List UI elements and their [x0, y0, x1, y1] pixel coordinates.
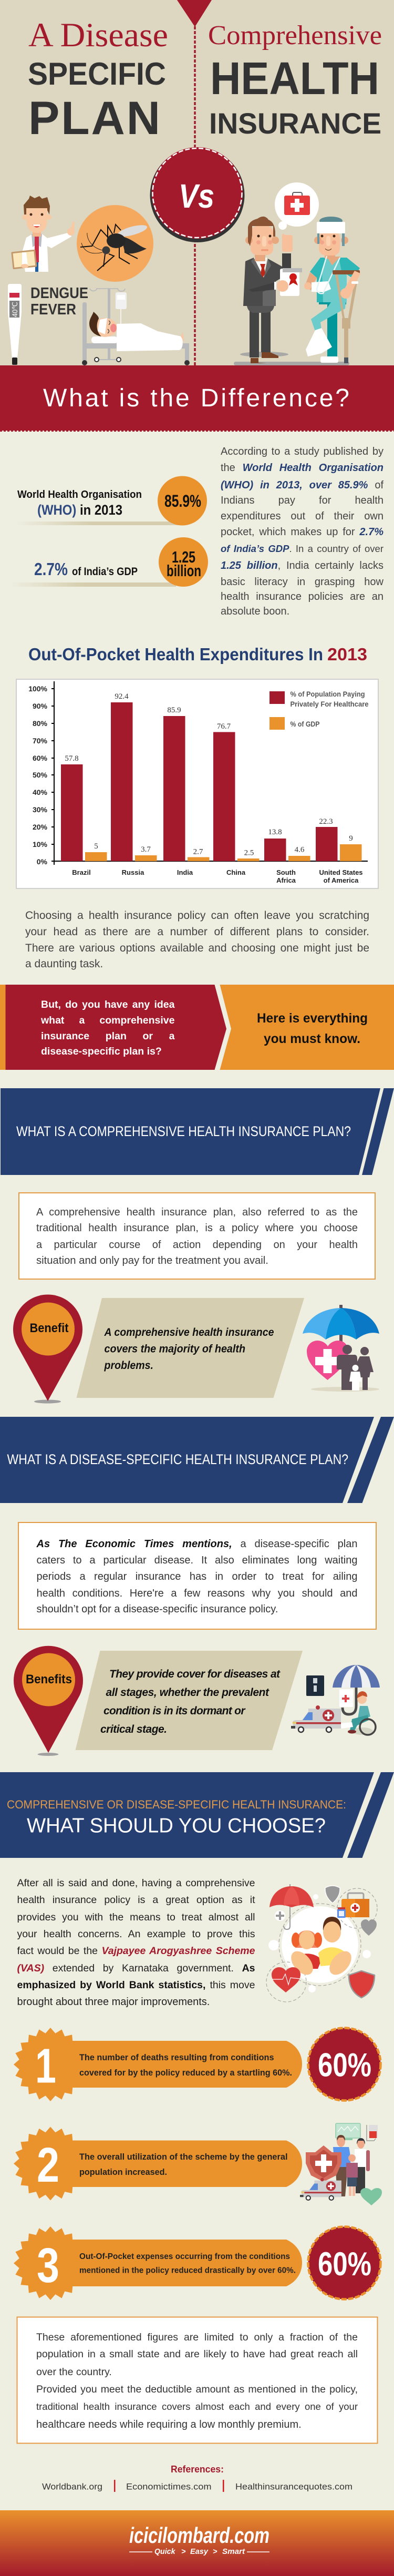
icon: dengue patient on hospital bed: [82, 289, 190, 365]
y axis with percentage labels: 70%: [33, 737, 48, 745]
vs badge: [150, 147, 245, 242]
text block: what should you choose paragraph: After all is said and done, having a comprehensive: [17, 1877, 255, 1888]
y axis with percentage labels: 30%: [33, 805, 48, 814]
answer text: [257, 1011, 368, 1046]
title: comprehensive health insurance: [208, 21, 382, 140]
improvement 2: increased utilization: population increased.: [79, 2167, 167, 2177]
question arrow: [5, 985, 226, 1070]
text block: what should you choose paragraph: emphasized by World Bank statistics, this move: [17, 1979, 255, 1990]
stat: world health organisation 85.9 percent: World Health Organisation: [17, 489, 142, 500]
bar value labels: 2.5: [244, 849, 254, 857]
panel: question and answer banner: [0, 985, 394, 1070]
text block: comprehensive plan definition: [36, 1207, 358, 1266]
bar value labels: 76.7: [217, 722, 231, 731]
footer: icicilombard brand: Smart: [222, 2548, 245, 2556]
y axis with percentage labels: 100%: [28, 684, 48, 693]
dashed centre divider: [194, 26, 196, 365]
text block: who study paragraph: Indians pay for health: [221, 495, 383, 506]
footer: icicilombard brand: >: [181, 2548, 186, 2556]
text block: who study paragraph: of India’s GDP. In a country of over: [221, 543, 383, 554]
benefits callout: all stages, whether the prevalent: [106, 1686, 269, 1699]
references: Economictimes.com: [126, 2481, 211, 2492]
banner: what is the difference: [0, 365, 394, 431]
footer: icicilombard brand: Easy: [190, 2548, 209, 2556]
chart legend: % of GDP: [290, 720, 319, 728]
question text: disease-specific plan is?: [41, 1046, 162, 1057]
footer: icicilombard brand: icicilombard.com: [129, 2523, 269, 2548]
answer text: you must know.: [264, 1031, 360, 1046]
badge: 60 percent for improvement 1: 60%: [318, 2047, 371, 2084]
icon: family under umbrella: [303, 1305, 379, 1392]
stat: 2.7 percent of india's gdp, 1.25 billion: 2.7%: [34, 559, 68, 579]
text block: choosing a policy paragraph: [25, 909, 369, 970]
question text: [41, 999, 175, 1057]
text block: disease-specific plan definition: health conditions. Here're a few reasons why you should and: [37, 1588, 357, 1599]
text block: comprehensive plan definition: traditional health insurance plan, is a policy where you choose: [36, 1222, 358, 1234]
text block: disease-specific plan definition: shouldn’t opt for a disease-specific insurance policy.: [37, 1603, 278, 1615]
y axis with percentage labels: 40%: [33, 788, 48, 796]
text block: closing notes: traditional health insurance covers almost each and every one of your: [36, 2401, 358, 2412]
banner: what is a comprehensive plan: [1, 1088, 394, 1175]
text block: what should you choose paragraph: your health concerns. An example to prove this: [17, 1928, 255, 1940]
text block: choosing a policy paragraph: a daunting task.: [25, 958, 103, 970]
panel: comparison header: [0, 0, 394, 365]
y axis with percentage labels: [28, 681, 368, 866]
bar value labels: 57.8: [65, 754, 79, 763]
benefit callout: covers the majority of health: [104, 1343, 245, 1355]
text block: choosing a policy paragraph: your head as there are a number of different plans to consider.: [25, 926, 369, 938]
improvement 1: fewer deaths: [14, 2028, 302, 2101]
improvement 3: lower out-of-pocket expenses: mentioned in the policy reduced drastically by over 60%.: [79, 2266, 296, 2275]
title: comprehensive health insurance: HEALTH: [210, 53, 379, 104]
question text: But, do you have any idea: [41, 999, 174, 1010]
icon: thermometer reading 40 degrees: 40℃: [11, 302, 19, 317]
text block: comprehensive plan definition: a particular course of action depending on your health: [36, 1239, 358, 1250]
references: References:: [171, 2464, 224, 2475]
benefit callout: [77, 1298, 304, 1398]
text block: disease-specific plan definition: caters to a particular disease. It also eliminates long waiting: [37, 1555, 357, 1566]
improvement 2: increased utilization: 2: [37, 2138, 59, 2192]
panel: disease-specific plan definition box: [18, 1522, 376, 1629]
title: a disease specific plan: PLAN: [28, 91, 160, 144]
text block: choosing a policy paragraph: There are various options available and choosing one might just be: [25, 942, 369, 954]
banner: what is the difference: What is the Difference?: [43, 384, 349, 412]
title: comprehensive health insurance: INSURANCE: [209, 107, 381, 140]
text block: closing notes: population in a small state and are likely to have had great reach all: [36, 2348, 358, 2360]
improvement 2: increased utilization: [14, 2127, 302, 2201]
banner: what should you choose: WHAT SHOULD YOU CHOOSE?: [27, 1815, 326, 1837]
text block: disease-specific plan definition: As The Economic Times mentions, a disease-specific plan: [37, 1538, 357, 1550]
country labels: of America: [324, 876, 359, 884]
icon: insurance agent showing a policy: [234, 217, 349, 365]
text block: choosing a policy paragraph: Choosing a health insurance policy can often leave you scratching: [25, 909, 369, 922]
y axis with percentage labels: 10%: [33, 840, 48, 849]
bar value labels: 85.9: [167, 706, 181, 714]
bar value labels: 4.6: [295, 845, 305, 854]
text block: closing notes: [36, 2332, 358, 2430]
bar value labels: 13.8: [268, 828, 282, 836]
badge: 60 percent for improvement 3: [308, 2227, 380, 2299]
stat: world health organisation 85.9 percent: 85.9%: [164, 492, 201, 510]
text block: closing notes: Provided you meet the deductible amount as mentioned in the policy,: [36, 2384, 358, 2395]
text block: disease-specific plan definition: periods a regular insurance has in order to treat for ailing: [37, 1571, 357, 1582]
benefits callout: They provide cover for diseases at: [109, 1668, 281, 1680]
icon: family with shield, monitor, ambulance and heart: [300, 2123, 382, 2205]
improvement 3: lower out-of-pocket expenses: 3: [37, 2238, 59, 2293]
label: dengue fever: [30, 285, 88, 318]
red bars: percent of population paying privately: [61, 702, 337, 861]
text block: what should you choose paragraph: health insurance policy is a great option as it: [17, 1894, 255, 1906]
icon: injured patient on crutches: [304, 217, 360, 363]
text block: who study paragraph: pocket, which makes up for 2.7%: [221, 526, 383, 538]
banner: what should you choose: COMPREHENSIVE OR DISEASE-SPECIFIC HEALTH INSURANCE:: [7, 1798, 346, 1811]
country labels: Russia: [122, 868, 144, 876]
y axis with percentage labels: 90%: [33, 702, 48, 710]
stat: 2.7 percent of india's gdp, 1.25 billion: billion: [167, 561, 201, 580]
icon: thermometer reading 40 degrees: [8, 284, 22, 365]
y axis with percentage labels: 20%: [33, 823, 48, 831]
bar value labels: 9: [349, 834, 353, 843]
answer text: Here is everything: [257, 1011, 368, 1026]
benefits callout: critical stage.: [100, 1723, 167, 1735]
badge: 60 percent for improvement 1: [308, 2028, 380, 2101]
heading: out-of-pocket health expenditures in 2013: 2013: [327, 645, 367, 664]
text block: closing notes: over the country.: [36, 2366, 112, 2378]
answer panel: [220, 985, 394, 1070]
text block: what should you choose paragraph: brought about three major improvements.: [17, 1996, 210, 2007]
stat: 2.7 percent of india's gdp, 1.25 billion: [10, 537, 208, 587]
question text: what a comprehensive: [41, 1015, 174, 1026]
country labels: South: [276, 868, 296, 876]
bar value labels: 2.7: [193, 847, 203, 856]
icon: speech bubble with first aid kit: [275, 182, 319, 230]
country labels: [72, 868, 363, 884]
footer: icicilombard brand: >: [213, 2548, 217, 2556]
text block: who study paragraph: health insurance policies are an: [221, 591, 383, 602]
y axis with percentage labels: 60%: [33, 754, 48, 762]
chart legend: % of Population Paying: [290, 690, 365, 698]
icon: x-ray, umbrella, ambulance and wheelchair patient: [291, 1665, 380, 1735]
references: [42, 2464, 352, 2492]
bar value labels: [65, 692, 353, 857]
text block: closing notes: These aforementioned figures are limited to only a fraction of the: [36, 2332, 358, 2343]
y axis with percentage labels: 80%: [33, 719, 48, 728]
banner: what should you choose: [0, 1772, 394, 1858]
panel: comprehensive plan definition box: [19, 1193, 375, 1279]
stat: world health organisation 85.9 percent: [16, 476, 207, 526]
country labels: China: [226, 868, 246, 876]
icon: mosquito: [77, 205, 153, 282]
chart legend: Privately For Healthcare: [290, 700, 369, 708]
footer: icicilombard brand: [0, 2510, 394, 2576]
text block: who study paragraph: expenditures out of their own: [221, 510, 383, 522]
text block: what should you choose paragraph: provides you with the means to treat almost all: [17, 1911, 255, 1923]
title: a disease specific plan: [28, 16, 168, 144]
text block: comprehensive plan definition: A comprehensive health insurance plan, also referred to as the: [36, 1207, 358, 1218]
improvement 3: lower out-of-pocket expenses: [14, 2226, 302, 2300]
vs badge: Vs: [179, 177, 214, 215]
text block: who study paragraph: basic literacy in grasping how: [221, 576, 383, 588]
country labels: Brazil: [72, 868, 91, 876]
text block: who study paragraph: the World Health Organisation: [221, 462, 383, 474]
country labels: India: [177, 868, 193, 876]
y axis with percentage labels: 50%: [33, 771, 48, 779]
country labels: United States: [319, 868, 363, 876]
orange bars: percent of gdp: [85, 844, 361, 861]
top triangle marker: [177, 0, 212, 27]
bar chart: out-of-pocket expenditures by country: [16, 679, 378, 888]
title: a disease specific plan: SPECIFIC: [28, 56, 166, 91]
label: dengue fever: FEVER: [30, 301, 76, 318]
country labels: Africa: [276, 876, 296, 884]
text block: disease-specific plan definition: [36, 1538, 357, 1615]
improvement 1: fewer deaths: covered for by the policy reduced by a startling 60%.: [79, 2068, 292, 2078]
references: Healthinsurancequotes.com: [235, 2481, 352, 2492]
text block: who study paragraph: 1.25 billion, India certainly lacks: [221, 560, 383, 571]
improvement 2: increased utilization: The overall utilization of the scheme by the general: [79, 2152, 288, 2162]
benefits pin marker: Benefits: [26, 1672, 72, 1686]
benefit pin marker: Benefit: [29, 1321, 69, 1335]
text block: who study paragraph: According to a study published by: [221, 446, 383, 457]
bar value labels: 22.3: [319, 817, 333, 826]
references: Worldbank.org: [42, 2481, 102, 2492]
icon: children in caring hands with health symbols: [266, 1884, 377, 2002]
benefits callout: [76, 1651, 303, 1750]
question text: insurance plan or a: [41, 1030, 174, 1042]
badge: 60 percent for improvement 3: 60%: [318, 2246, 371, 2283]
icon: doctor with clipboard: [11, 196, 75, 272]
stat: world health organisation 85.9 percent: (WHO) in 2013: [37, 502, 122, 518]
improvement 1: fewer deaths: 1: [35, 2039, 56, 2093]
stat: 2.7 percent of india's gdp, 1.25 billion: of India’s GDP: [72, 566, 138, 578]
text block: what should you choose paragraph: [17, 1877, 255, 2007]
label: dengue fever: DENGUE: [30, 285, 88, 302]
text block: closing notes: healthcare needs while requiring a low monthly premium.: [36, 2419, 302, 2430]
bar value labels: 92.4: [115, 692, 129, 701]
title: comprehensive health insurance: Comprehensive: [208, 21, 382, 50]
text block: who study paragraph: (WHO) in 2013, over 85.9% of: [221, 479, 383, 491]
footer: icicilombard brand: Quick: [154, 2548, 175, 2556]
text block: who study paragraph: absolute boon.: [221, 606, 289, 617]
stat: 2.7 percent of india's gdp, 1.25 billion: 1.25: [172, 548, 195, 566]
chart legend: [269, 690, 369, 730]
benefit pin marker: [13, 1295, 82, 1404]
heading: out-of-pocket health expenditures in 2013: Out-Of-Pocket Health Expenditures In: [28, 645, 323, 664]
text block: who study paragraph: [221, 446, 383, 617]
benefit callout: A comprehensive health insurance: [104, 1326, 274, 1338]
benefits callout: condition is in its dormant or: [103, 1705, 246, 1717]
text block: what should you choose paragraph: (VAS) extended by Karnataka government. As: [17, 1962, 255, 1974]
y axis with percentage labels: 0%: [37, 857, 48, 866]
bar value labels: 5: [94, 842, 98, 851]
title: a disease specific plan: A Disease: [28, 16, 168, 54]
banner: what is a disease-specific plan: [0, 1417, 394, 1503]
bar value labels: 3.7: [141, 845, 151, 854]
benefit callout: problems.: [104, 1359, 153, 1372]
panel: closing notes box: [17, 2317, 377, 2444]
text block: what should you choose paragraph: fact would be the Vajpayee Arogyashree Scheme: [17, 1945, 255, 1957]
improvement 3: lower out-of-pocket expenses: Out-Of-Pocket expenses occurring from the conditions: [79, 2252, 290, 2261]
text block: comprehensive plan definition: situation and only pay for the treatment you avail.: [36, 1255, 268, 1266]
improvement 1: fewer deaths: The number of deaths resulting from conditions: [79, 2052, 274, 2062]
benefits pin marker: [14, 1646, 83, 1756]
